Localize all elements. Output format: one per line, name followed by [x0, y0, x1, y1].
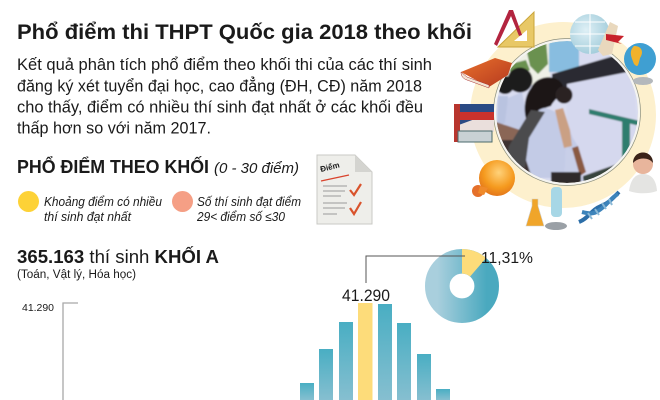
icon: red book — [461, 58, 512, 88]
photo of students — [496, 41, 638, 183]
icon: score sheet — [317, 155, 372, 224]
legend: candidates scoring 29 to 30: 29< điểm số ≤30 — [196, 210, 285, 224]
y axis: 41.290 — [22, 303, 54, 314]
intro text block: thấp hơn so với năm 2017. — [17, 120, 211, 138]
intro text block: cho thấy, điểm có nhiều thí sinh đạt nhất ở các khối đều — [17, 98, 423, 116]
callout: peak value: 41.290 — [342, 287, 390, 305]
donut chart — [437, 249, 487, 311]
callout: percentage: 11,31% — [481, 250, 533, 267]
photo ring — [495, 40, 639, 184]
legend: most candidates score range: thí sinh đạt nhất — [44, 210, 132, 224]
icon: orange flask bulb — [472, 160, 515, 197]
intro text block: Kết quả phân tích phổ điểm theo khối thi của các thí sinh — [17, 56, 432, 74]
y axis — [22, 303, 78, 400]
legend: most candidates score range — [18, 191, 162, 224]
title: Phổ điểm thi THPT Quốc gia 2018 theo khối — [17, 20, 472, 44]
block A heading: (Toán, Vật lý, Hóa học) — [17, 269, 136, 281]
icon: globe with diploma — [570, 14, 624, 56]
icon: lab flask and test tube — [526, 187, 567, 230]
legend: candidates scoring 29 to 30 — [172, 191, 301, 224]
callout connector line — [366, 256, 465, 283]
icon: compass and set square — [494, 10, 534, 47]
legend: most candidates score range: Khoảng điểm có nhiều — [44, 195, 162, 209]
icon: person — [629, 152, 657, 193]
icon: flag book — [454, 104, 494, 142]
bar chart — [300, 303, 450, 400]
section heading: (0 - 30 điểm) — [214, 160, 299, 177]
block A heading — [17, 246, 219, 281]
legend: candidates scoring 29 to 30: Số thí sinh đạt điểm — [197, 195, 301, 209]
intro text block — [17, 56, 432, 138]
intro text block: đăng ký xét tuyển đại học, cao đẳng (ĐH, CĐ) năm 2018 — [17, 76, 422, 96]
illustration: exam photo with study icons — [454, 10, 657, 230]
icon: DNA helix — [579, 192, 619, 222]
background circle — [470, 22, 656, 208]
icon: score sheet: Điểm — [319, 160, 340, 174]
block A heading: 365.163 thí sinh KHỐI A — [17, 246, 219, 267]
icon: desk globe — [624, 43, 656, 85]
section heading: PHỔ ĐIỂM THEO KHỐI — [17, 156, 209, 177]
